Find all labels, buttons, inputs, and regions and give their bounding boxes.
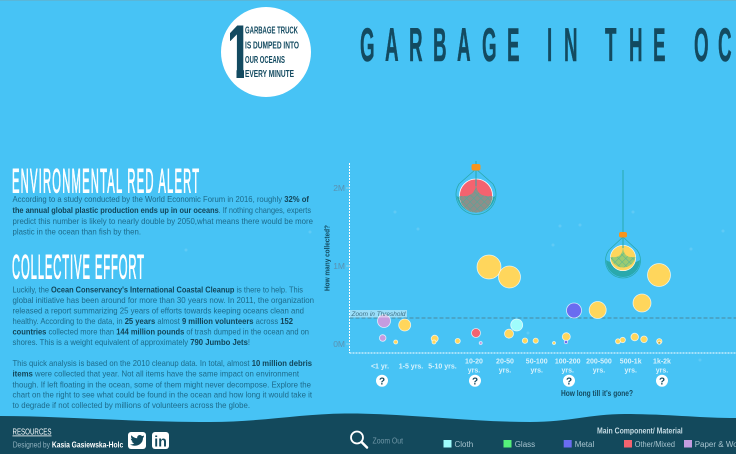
x axis labels: yrs. xyxy=(468,367,480,374)
zoom out label: Zoom Out xyxy=(372,436,404,446)
legend: glass: Glass xyxy=(515,440,535,449)
x axis labels: 1-5 yrs. xyxy=(399,363,423,370)
y axis title: How many collected? xyxy=(322,225,332,291)
callout text: EVERY MINUTE xyxy=(245,68,294,80)
question mark icons: ? xyxy=(566,376,572,387)
text block: collective effort paragraph: global initiative has been around for more than 30 years now. In 2011, the organization xyxy=(12,296,314,305)
x axis title: How long till it's gone? xyxy=(561,389,633,398)
callout text: GARBAGE TRUCK xyxy=(245,24,298,36)
text block: collective effort paragraph: Luckily, the Ocean Conservancy's International Coastal Cleanup is there to help. This xyxy=(12,286,303,295)
x axis labels: 20-50 xyxy=(496,358,514,366)
text block: analysis paragraph: This quick analysis is based on the 2010 cleanup data. In total, almost 10 million debris xyxy=(12,359,312,368)
x axis labels: 100-200 xyxy=(555,358,581,366)
icon: magnifier zoom out xyxy=(351,432,367,448)
callout text: OUR OCEANS xyxy=(245,54,285,66)
legend: cloth: Cloth xyxy=(454,440,473,449)
callout: garbage truck fact xyxy=(221,7,311,97)
text block: analysis paragraph: to degrade if not collected by millions of volunteers across the globe. xyxy=(12,401,250,410)
text block: collective effort paragraph: countries collected more than 144 million pounds of trash dumped in the ocean and on xyxy=(12,328,309,337)
legend: metal: Metal xyxy=(575,440,594,449)
icon: linkedin xyxy=(152,432,169,450)
text block: analysis paragraph: items were collected that year. Not all items have the same impact on environment xyxy=(12,370,300,379)
text block: red alert paragraph: predict this number is likely to nearly double by 2050,what means there would be more xyxy=(12,217,313,226)
icon: twitter xyxy=(128,432,146,449)
x axis labels: yrs. xyxy=(656,367,668,374)
x axis labels xyxy=(371,358,671,374)
y axis tick labels: 0M xyxy=(333,339,345,349)
heading: collective effort: COLLECTIVE EFFORT xyxy=(12,249,144,287)
text block: collective effort paragraph: shores. This is a weight equivalent of approximately 790 Jumbo Jets! xyxy=(12,338,250,347)
text block: collective effort paragraph: healthy. According to the data, in 25 years almost 9 million volunteers across 152 xyxy=(12,317,293,326)
question mark icons: ? xyxy=(379,376,385,387)
legend: glass xyxy=(504,440,535,449)
legend: other/mixed: Other/Mixed xyxy=(635,440,675,449)
bubble chart xyxy=(322,161,736,398)
legend: metal xyxy=(564,440,594,449)
designer credit: Designed by Kasia Gasiewska-Holc xyxy=(13,440,124,450)
text block: red alert paragraph: the annual global plastic production ends up in our oceans. If nothing changes, experts xyxy=(12,206,311,215)
threshold label: Zoom in Threshold xyxy=(350,311,406,318)
resources link: RESOURCES xyxy=(12,428,52,436)
x axis labels: yrs. xyxy=(624,367,637,374)
text block: analysis paragraph: though. If left floating in the ocean, some of them might never decompose. Explore the xyxy=(12,380,311,389)
text block: red alert paragraph: plastic in the ocean than fish by then. xyxy=(12,228,141,236)
text block: analysis paragraph xyxy=(12,359,313,410)
question mark icons: ? xyxy=(472,376,478,387)
legend title: Main Component/ Material xyxy=(597,426,683,436)
text block: collective effort paragraph: released a report summarizing 25 years of efforts towards keeping oceans clean and xyxy=(12,307,304,316)
big number one: 1 xyxy=(226,10,252,95)
x axis labels: yrs. xyxy=(593,367,605,374)
heading: environmental red alert: ENVIRONMENTAL RED ALERT xyxy=(12,163,199,201)
question mark icons: ? xyxy=(659,376,665,387)
icon: linkedin: in xyxy=(154,434,167,450)
x axis labels: yrs. xyxy=(499,367,511,374)
text block: analysis paragraph: chart on the right to see what could be found in the ocean and how long it would take it xyxy=(12,391,313,400)
x axis labels: 10-20 xyxy=(465,358,483,366)
bubbles xyxy=(378,255,670,344)
callout text: IS DUMPED INTO xyxy=(245,40,299,52)
legend xyxy=(444,426,736,449)
x axis labels: <1 yr. xyxy=(371,363,389,370)
y axis tick labels xyxy=(333,183,345,349)
x axis labels: 50-100 xyxy=(526,358,548,366)
y axis tick labels: 1M xyxy=(333,261,345,271)
text block: collective effort paragraph xyxy=(12,286,314,347)
x axis labels: yrs. xyxy=(530,367,543,374)
x axis labels: 200-500 xyxy=(586,358,612,366)
x axis labels: yrs. xyxy=(561,367,574,374)
axes xyxy=(346,163,736,353)
text block: red alert paragraph xyxy=(12,195,313,236)
legend: cloth xyxy=(444,440,473,449)
icon: net with yellow bubble xyxy=(606,170,640,278)
x axis labels: 1k-2k xyxy=(653,358,671,366)
text block: red alert paragraph: According to a study conducted by the World Economic Forum in 2016, roughly 32% of xyxy=(12,195,309,204)
y axis tick labels: 2M xyxy=(333,183,345,193)
x axis labels: 5-10 yrs. xyxy=(428,363,457,370)
callout text xyxy=(245,24,299,80)
footer wave xyxy=(0,413,736,454)
x axis labels: 500-1k xyxy=(620,358,642,366)
icon: net with red bubble xyxy=(456,161,496,215)
question mark icons xyxy=(376,375,668,387)
